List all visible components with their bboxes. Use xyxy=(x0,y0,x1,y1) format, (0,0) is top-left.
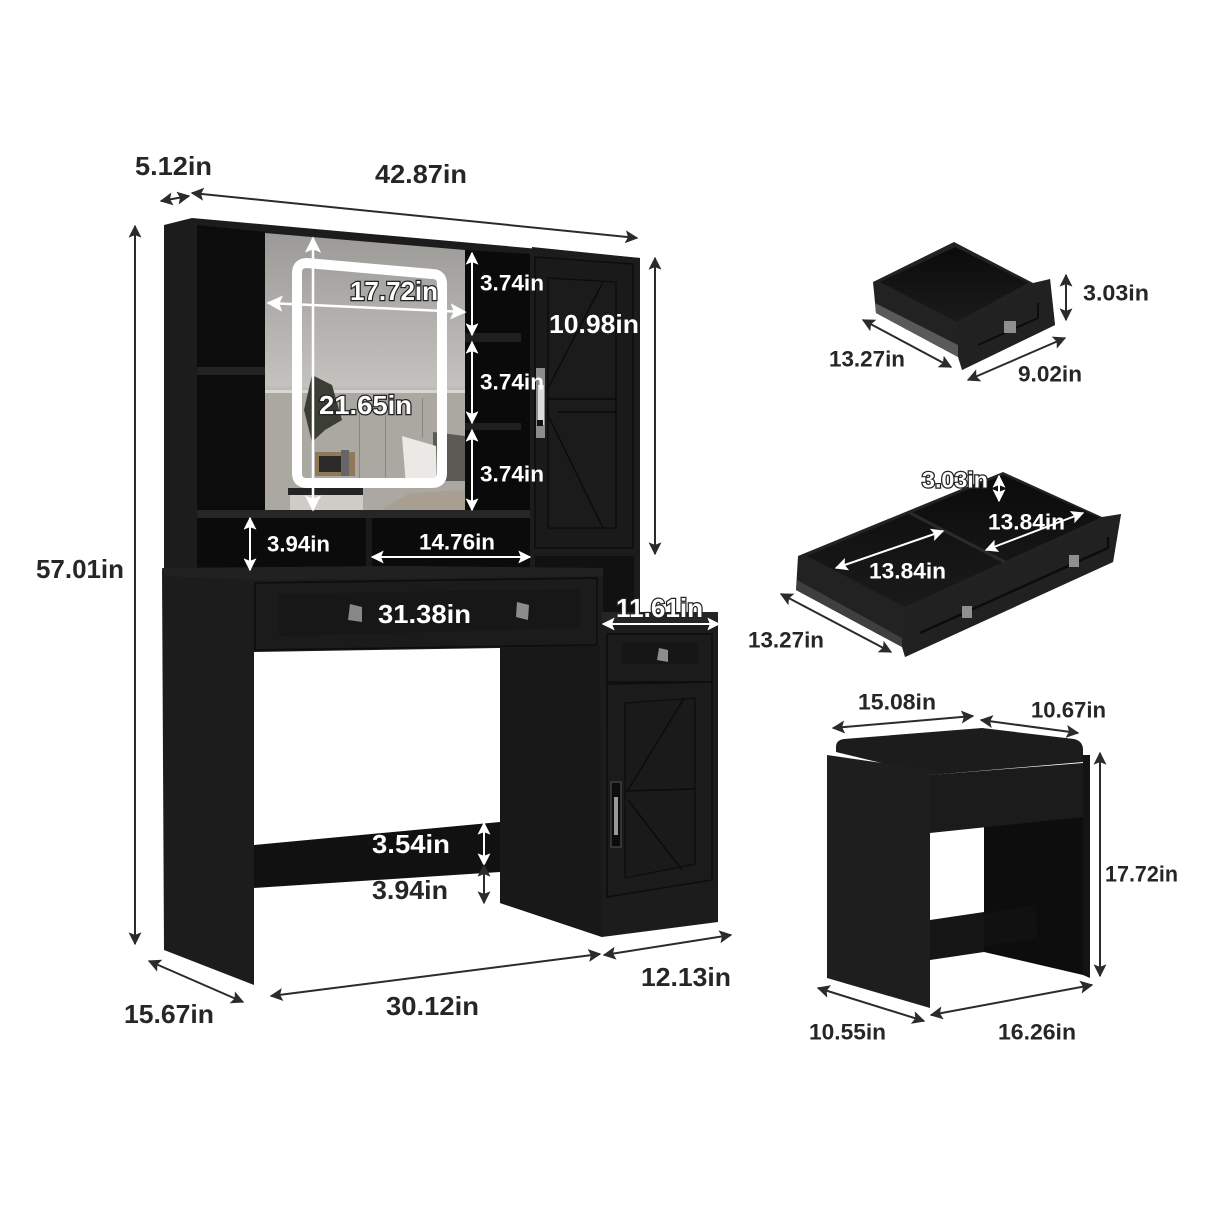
stool xyxy=(827,728,1090,1008)
shallow drawer xyxy=(873,242,1055,370)
dimension: stool seat 15.08in xyxy=(833,690,973,728)
mirror with LED frame xyxy=(265,233,465,510)
vanity desk with hutch xyxy=(162,218,718,985)
dimension: hutch depth 5.12in xyxy=(135,151,212,201)
dimension: shallow drawer width 9.02in: 9.02in xyxy=(1018,362,1082,386)
dimension: height 57.01in: 57.01in xyxy=(36,554,124,584)
dimension: shelf 3.74in top xyxy=(472,253,544,335)
deep partitioned drawer xyxy=(796,472,1121,657)
stool frame xyxy=(827,755,1090,1008)
dimension: deep drawer depth 13.27in: 13.27in xyxy=(748,628,824,652)
dimension: stool depth 10.55in xyxy=(809,988,924,1044)
wide drawer xyxy=(255,578,597,650)
dimension: shallow drawer height 3.03in xyxy=(1066,275,1149,320)
dimension: hutch depth 5.12in: 5.12in xyxy=(135,151,212,181)
dimension: cubby width 14.76in: 14.76in xyxy=(419,530,495,554)
dimension: clearance 3.94in: 3.94in xyxy=(372,875,448,905)
dimension: knee width 30.12in: 30.12in xyxy=(386,991,479,1021)
dimension: stool height 17.72in: 17.72in xyxy=(1105,862,1178,886)
dimension: shallow drawer depth 13.27in: 13.27in xyxy=(829,346,905,372)
dimension: rail 3.54in xyxy=(372,823,484,865)
dimension: depth 15.67in: 15.67in xyxy=(124,999,214,1029)
dimension: rail 3.54in: 3.54in xyxy=(372,829,450,859)
upper barn door xyxy=(532,247,640,556)
dimension: shallow drawer depth 13.27in xyxy=(829,320,951,372)
dimension: right compartment 13.84in xyxy=(986,510,1083,550)
dimension: door height 10.98in: 10.98in xyxy=(549,309,639,339)
dimension: deep drawer height 3.03in xyxy=(922,468,999,501)
dimension: mirror width 17.72in: 17.72in xyxy=(350,276,438,306)
dimension: cubby height 3.94in xyxy=(250,518,330,570)
dimension: deep drawer height 3.03in: 3.03in xyxy=(922,468,988,492)
dimension: stool width 16.26in xyxy=(931,985,1092,1044)
dimension: depth 15.67in xyxy=(124,961,243,1029)
dimension: shelf 3.74in top: 3.74in xyxy=(480,270,544,296)
cabinet drawer xyxy=(602,612,718,682)
dimension: mirror width 17.72in xyxy=(268,276,465,312)
dimension: left compartment 13.84in: 13.84in xyxy=(869,558,946,584)
seat cushion xyxy=(836,728,1083,775)
dimension: stool seat 10.67in: 10.67in xyxy=(1031,698,1106,722)
dimension: clearance 3.94in xyxy=(372,865,484,905)
dimension: stool width 16.26in: 16.26in xyxy=(998,1020,1076,1044)
desktop and left leg xyxy=(162,566,718,985)
dimension: shelf 3.74in middle xyxy=(472,342,544,423)
dimension: stool depth 10.55in: 10.55in xyxy=(809,1020,886,1044)
dimension: shelf 3.74in bottom: 3.74in xyxy=(480,462,544,486)
dimension: right compartment 13.84in: 13.84in xyxy=(988,510,1065,534)
dimension: mirror height 21.65in: 21.65in xyxy=(319,390,412,420)
dimension: cabinet width 11.61in: 11.61in xyxy=(616,593,703,623)
dimension: shallow drawer height 3.03in: 3.03in xyxy=(1083,280,1149,306)
cabinet barn door xyxy=(607,682,712,897)
dimension: deep drawer depth 13.27in xyxy=(748,594,891,652)
dimension: cubby height 3.94in: 3.94in xyxy=(267,532,330,556)
dimension: drawer width 31.38in: 31.38in xyxy=(378,599,471,629)
hutch body xyxy=(164,218,640,618)
dimension: knee width 30.12in xyxy=(271,954,600,1021)
dimension: cabinet 12.13in xyxy=(604,935,731,992)
dimension: cabinet 12.13in: 12.13in xyxy=(641,962,731,992)
dimension: shelf 3.74in middle: 3.74in xyxy=(480,370,544,394)
foot rail xyxy=(254,822,500,888)
dimension: stool seat 10.67in xyxy=(981,698,1106,733)
dimension: shelf 3.74in bottom xyxy=(472,430,544,510)
dimension: stool seat 15.08in: 15.08in xyxy=(858,690,936,714)
dimension: left compartment 13.84in xyxy=(836,531,946,584)
dimension: width 42.87in xyxy=(192,159,637,238)
dimension: width 42.87in: 42.87in xyxy=(375,159,467,189)
dimension: shallow drawer width 9.02in xyxy=(968,338,1082,386)
